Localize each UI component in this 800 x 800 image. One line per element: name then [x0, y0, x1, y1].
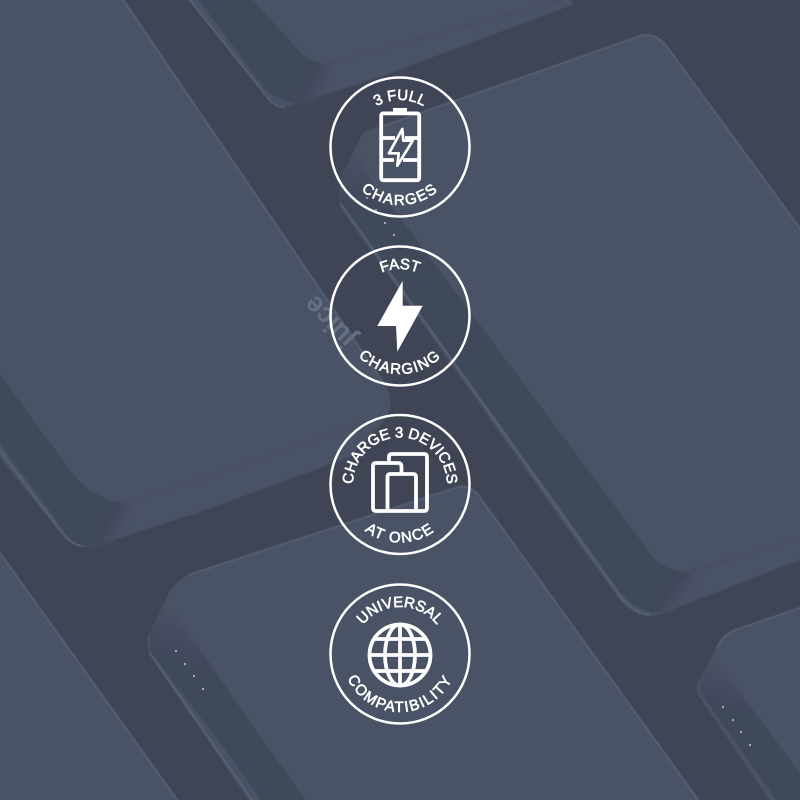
badge: charge 3 devices at once	[329, 414, 471, 556]
badge: universal compatibility	[329, 583, 471, 725]
power bank: center right	[339, 35, 800, 616]
brand logo on device: juice	[297, 290, 362, 355]
icon: lightning bolt	[377, 281, 423, 352]
power bank: top	[184, 0, 572, 107]
power bank: upper left	[0, 0, 390, 547]
icon: globe	[370, 624, 430, 686]
power bank: lower left corner	[0, 546, 181, 800]
badge: 3 full charges	[329, 76, 471, 218]
label: charging: CHARGING	[360, 350, 440, 374]
status dots: bottom center device	[175, 650, 204, 690]
label: at once: AT ONCE	[364, 522, 434, 543]
icon: devices	[373, 454, 427, 511]
badge: fast charging	[329, 245, 471, 387]
label: compatibility: COMPATIBILITY	[348, 674, 450, 712]
icon: battery	[381, 108, 419, 180]
status dots: bottom right device	[722, 706, 751, 746]
power bank: bottom right	[697, 606, 800, 800]
status dots: center right device	[366, 197, 395, 236]
label: fast: FAST	[379, 258, 422, 272]
power bank: bottom center	[147, 487, 702, 800]
label: 3 full: 3 FULL	[373, 89, 424, 106]
label: charge 3 devices: CHARGE 3 DEVICES	[342, 426, 458, 484]
label: charges: CHARGES	[363, 184, 436, 206]
label: universal: UNIVERSAL	[356, 596, 442, 625]
